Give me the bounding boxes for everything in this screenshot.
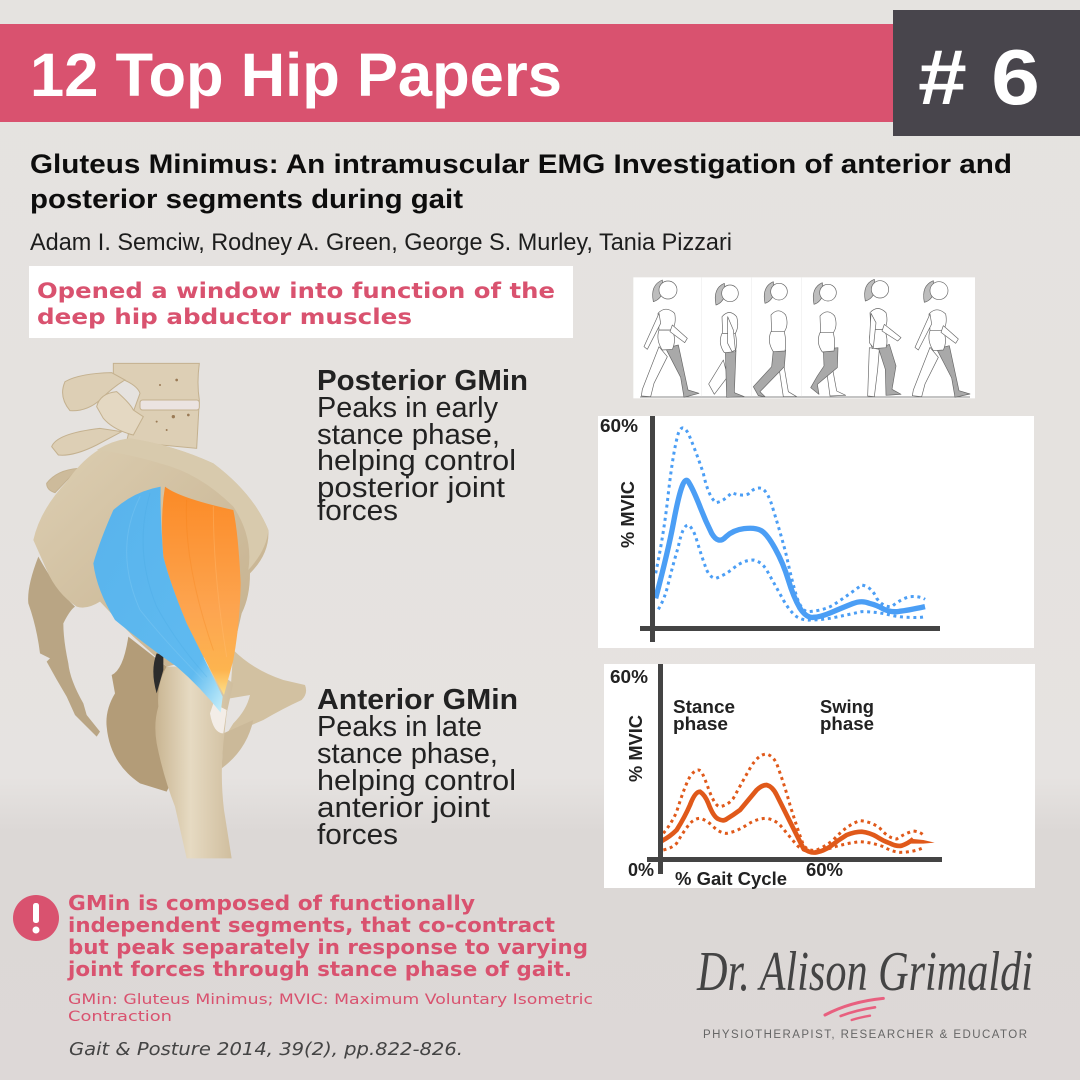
figure 2 (709, 283, 744, 397)
callout: key message: Opened a window into function of the (37, 279, 555, 304)
anterior GMin text: anterior joint (317, 792, 490, 824)
paper number badge: # 6 (918, 33, 1040, 121)
tagline: PHYSIOTHERAPIST, RESEARCHER & EDUCATOR (703, 1029, 1027, 1041)
chart: anterior GMin EMG (604, 664, 1035, 889)
lumbar vertebra (47, 363, 199, 493)
chart: anterior GMin EMG: Swing (820, 697, 874, 717)
paper number badge (893, 10, 1080, 136)
figure 5 (865, 279, 901, 397)
anterior GMin text: helping control (317, 765, 516, 797)
axis labels: 60% (600, 416, 638, 436)
citation: Gait & Posture 2014, 39(2), pp.822-826. (69, 1039, 463, 1060)
conclusion text: but peak separately in response to varying (68, 935, 588, 959)
anterior GMin text: forces (317, 819, 398, 851)
curves (656, 428, 925, 620)
authors: Adam I. Semciw, Rodney A. Green, George S. Murley, Tania Pizzari (30, 229, 732, 256)
chart: anterior GMin EMG: phase (820, 714, 874, 734)
muscle fibres (127, 493, 227, 680)
posterior GMin text: Posterior GMin (317, 365, 528, 397)
axes (658, 664, 663, 874)
posterior GMin text (317, 365, 528, 527)
posterior GMin text: posterior joint (317, 472, 505, 504)
vertebra speckles (156, 379, 190, 431)
signature logo (696, 941, 1033, 1041)
chart: anterior GMin EMG: % Gait Cycle (675, 869, 787, 889)
iliac crest highlight (97, 438, 268, 570)
figure 4 (811, 283, 846, 396)
posterior GMin text: stance phase, (317, 419, 500, 451)
gait sequence illustration (633, 277, 975, 398)
axis labels: 60% (610, 667, 648, 687)
figure 3 (753, 282, 797, 397)
signature underline strokes (825, 998, 883, 1020)
sacrum (28, 557, 100, 737)
conclusion text (67, 891, 588, 981)
icon: exclamation (13, 895, 59, 941)
anterior segment muscle (162, 487, 241, 695)
chart: posterior GMin EMG (598, 416, 1034, 648)
anterior GMin text (317, 684, 518, 851)
paper title (30, 149, 1012, 214)
paper title: Gluteus Minimus: An intramuscular EMG Investigation of anterior and (30, 149, 1012, 179)
curves (662, 754, 935, 853)
tendon insertion (210, 703, 227, 733)
chart: anterior GMin EMG: phase (673, 714, 728, 734)
axes (650, 416, 655, 642)
chart: anterior GMin EMG: % MVIC (626, 715, 646, 782)
phase labels: Stance (673, 697, 735, 717)
abbreviations footnote: GMin: Gluteus Minimus; MVIC: Maximum Voluntary Isometric (68, 992, 593, 1008)
posterior GMin text: forces (317, 495, 398, 527)
callout: key message (29, 266, 573, 338)
conclusion text: independent segments, that co-contract (68, 913, 555, 937)
anterior GMin text: Anterior GMin (317, 684, 518, 716)
abbreviations footnote: Contraction (68, 1009, 172, 1025)
posterior GMin text: Peaks in early (317, 392, 498, 424)
femur (155, 667, 233, 858)
pubic bone (225, 650, 306, 737)
callout: key message: deep hip abductor muscles (37, 305, 412, 330)
abbreviations footnote (68, 992, 593, 1025)
conclusion text: joint forces through stance phase of gait. (67, 957, 572, 981)
posterior segment muscle (93, 487, 223, 713)
header banner (0, 24, 893, 122)
chart: anterior GMin EMG: 60% (806, 860, 843, 880)
joint shadow (153, 653, 163, 693)
conclusion text: GMin is composed of functionally (68, 891, 475, 915)
figure 6 (912, 281, 970, 397)
posterior GMin text: helping control (317, 445, 516, 477)
anterior GMin text: Peaks in late (317, 711, 482, 743)
chart: anterior GMin EMG: 0% (628, 860, 654, 880)
illustration: hip anatomy with gluteus minimus segments (28, 363, 306, 858)
ilium wing (33, 438, 268, 667)
paper title: posterior segments during gait (30, 184, 463, 214)
figure 1 (641, 280, 699, 397)
anterior GMin text: stance phase, (317, 738, 498, 770)
title: 12 Top Hip Papers (30, 41, 562, 109)
chart: posterior GMin EMG: % MVIC (618, 481, 638, 548)
ischium (106, 637, 187, 792)
